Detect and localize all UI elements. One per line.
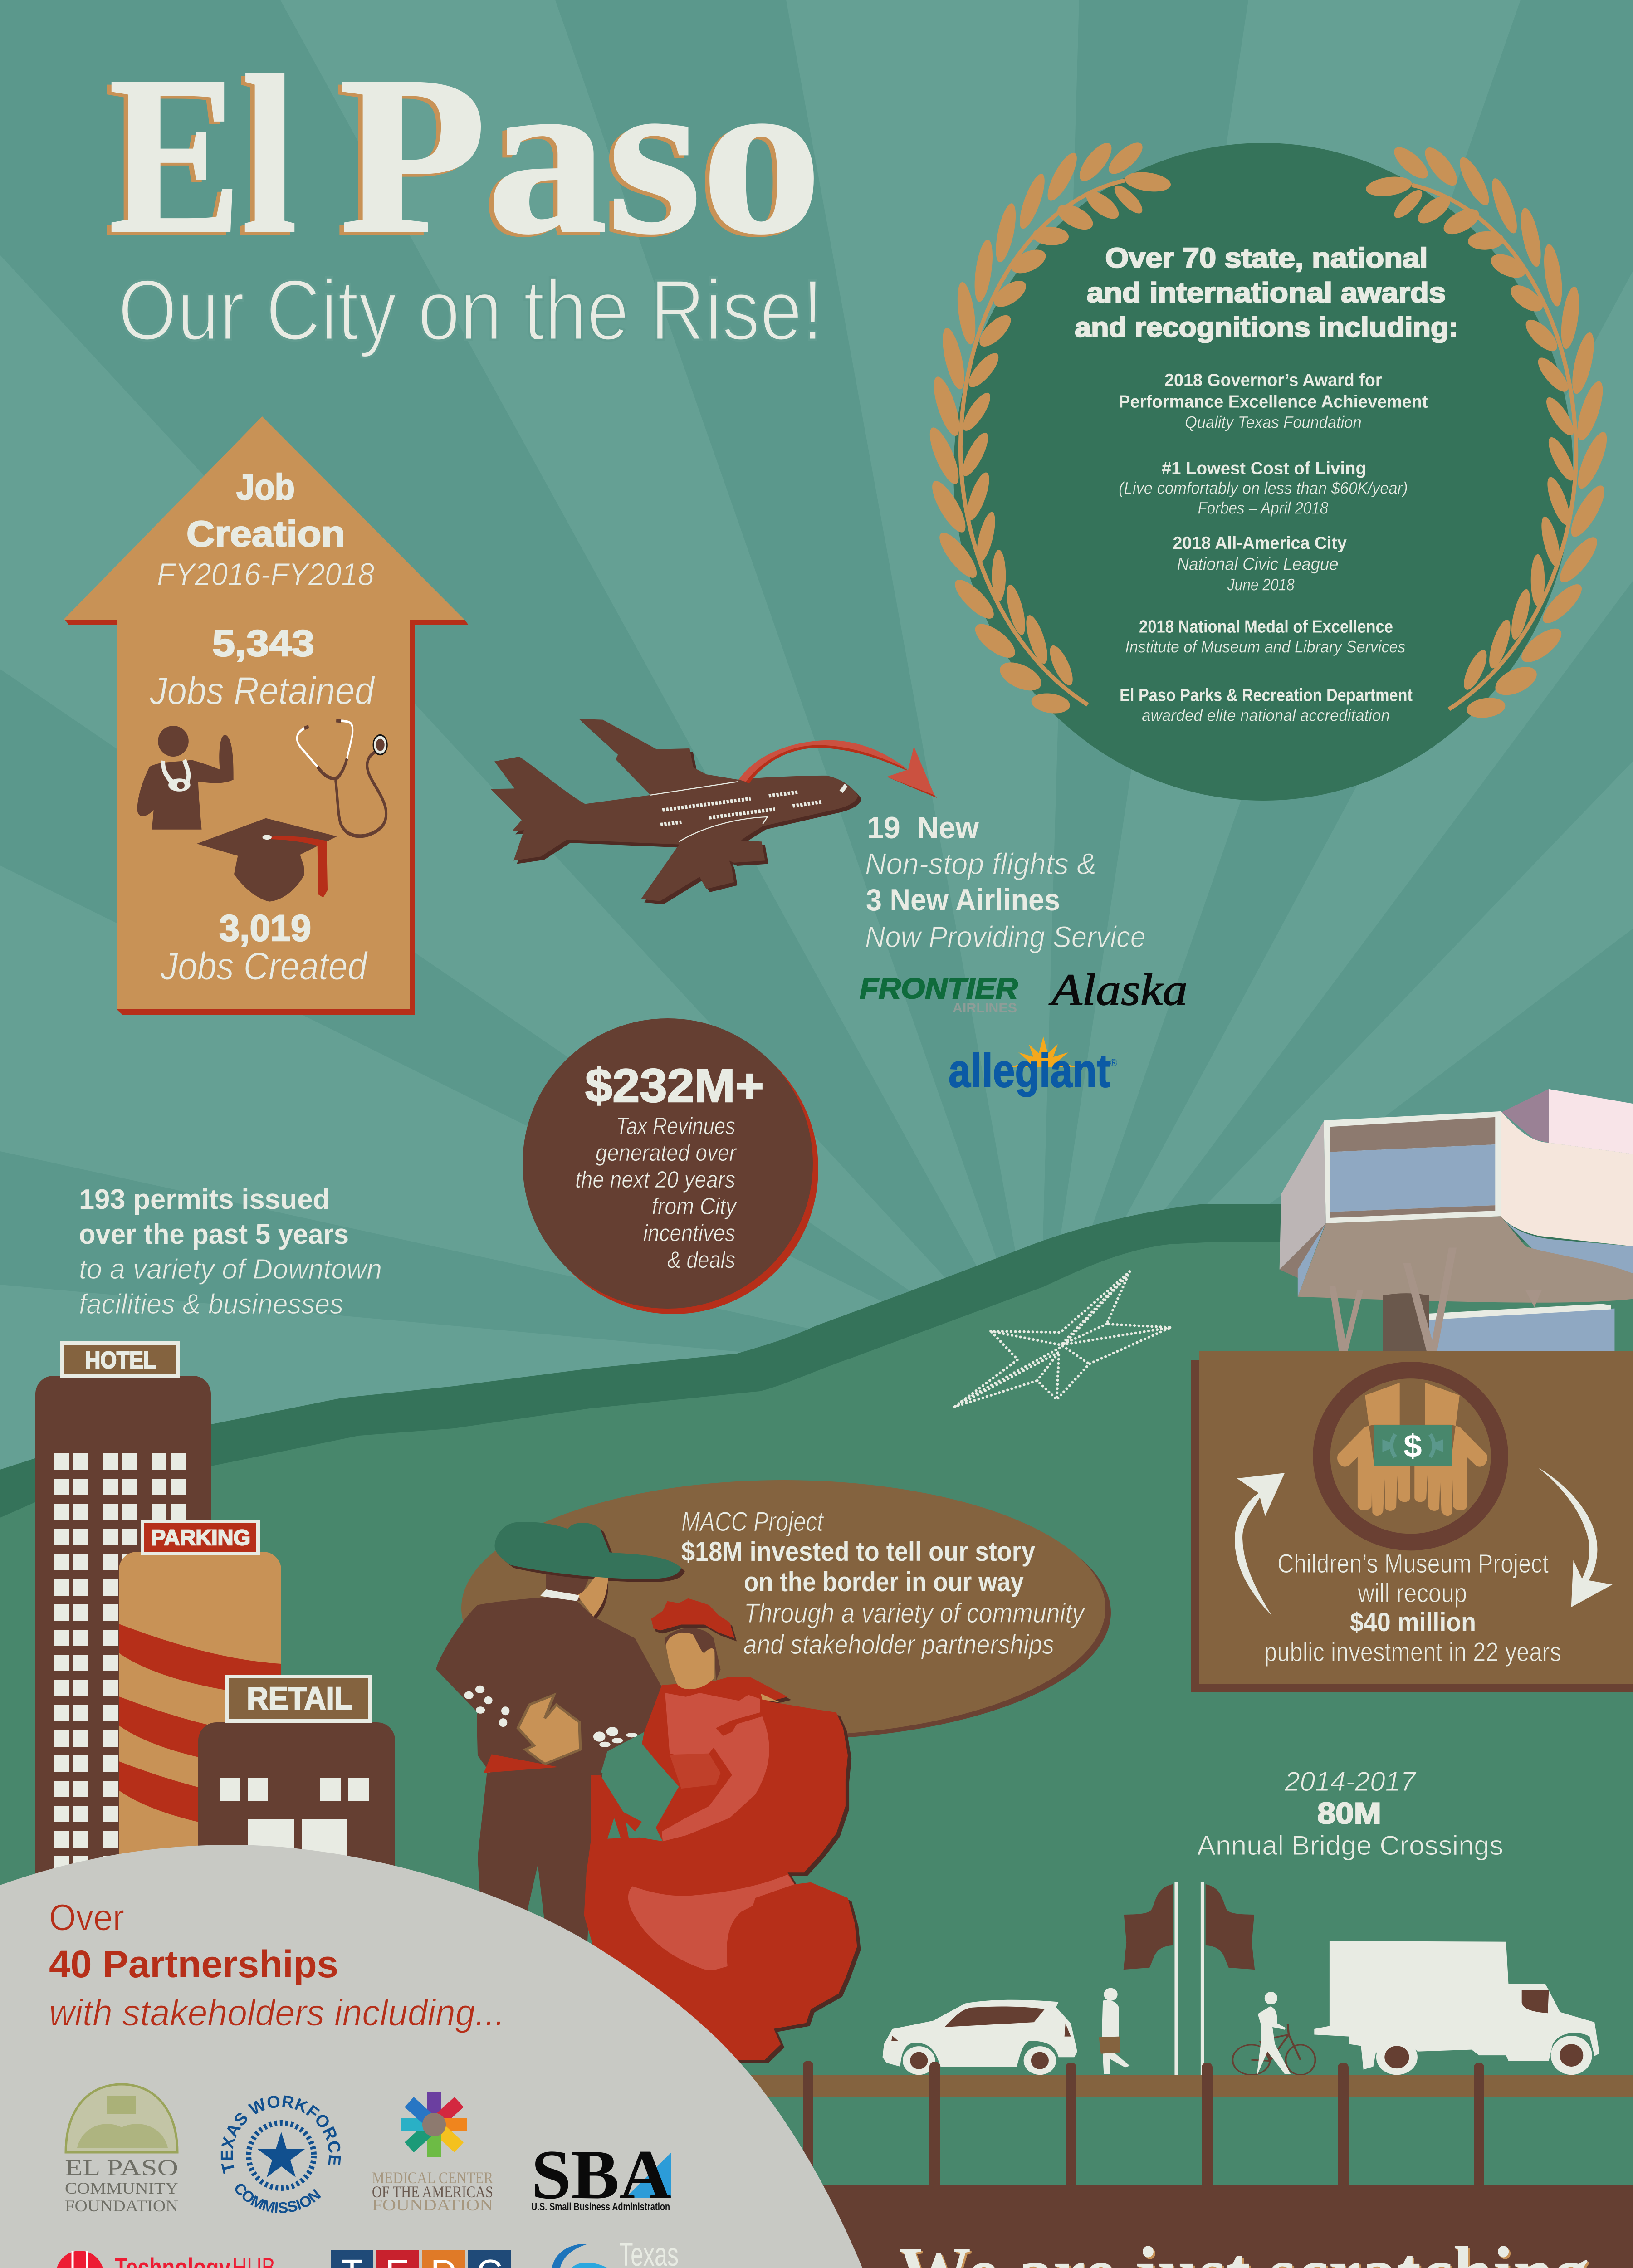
awards list: El Paso Parks & Recreation Department	[1120, 685, 1413, 705]
panel: MACC project ellipse: $18M invested to tell our story	[681, 1536, 1036, 1567]
awards list: 2018 National Medal of Excellence	[1139, 617, 1393, 636]
sign: retail	[227, 1677, 370, 1721]
stat: jobs retained: 5,343	[212, 623, 314, 664]
awards list: awarded elite national accreditation	[1142, 706, 1390, 724]
illustration: parking garage	[119, 1521, 281, 1960]
text: bridge crossings: Annual Bridge Crossings	[1197, 1830, 1503, 1861]
panel: MACC project ellipse: MACC Project	[681, 1506, 824, 1537]
awards list: Forbes – April 2018	[1198, 499, 1329, 517]
text: downtown permits: to a variety of Downtown	[79, 1254, 382, 1285]
callout: tax revenues circle: the next 20 years	[575, 1167, 735, 1193]
icon: box truck	[1314, 1941, 1599, 2075]
logo: small business administration: SBA	[531, 2136, 671, 2214]
title: El	[104, 32, 293, 284]
icon: hands holding money	[1321, 1370, 1500, 1542]
logo: el paso community foundation	[65, 2084, 178, 2215]
hill landscape	[0, 1202, 1633, 2223]
awards list: Performance Excellence Achievement	[1119, 392, 1428, 412]
callout: tax revenues circle: generated over	[596, 1140, 737, 1166]
logo: technology hub	[56, 2251, 275, 2268]
panel: MACC project ellipse: Through a variety of community	[744, 1598, 1086, 1628]
callout: tax revenues circle: from City	[652, 1193, 738, 1220]
illustration: bridge crossing traffic	[883, 1882, 1599, 2076]
icon: left laurel branch	[924, 137, 1172, 716]
illustration: folklorico dancer	[584, 1598, 861, 2063]
stat: jobs created: Jobs Created	[160, 945, 368, 988]
icon: dotted star on the mountain	[955, 1271, 1171, 1407]
logo: frontier airlines: AIRLINES	[953, 1001, 1017, 1016]
sign: hotel	[62, 1343, 178, 1376]
stat: jobs retained	[149, 623, 375, 713]
logo: frontier airlines: FRONTIER	[860, 972, 1018, 1005]
arrow: red flight path	[739, 740, 937, 798]
icon: airplane	[491, 719, 861, 904]
logo: medical center of the americas foundation: MEDICAL CENTER	[372, 2169, 493, 2187]
museum project text	[1264, 1549, 1561, 1667]
awards list: #1 Lowest Cost of Living	[1162, 459, 1366, 479]
text: downtown permits: 193 permits issued	[79, 1184, 330, 1215]
logo: medical center of the americas foundation: OF THE AMERICAS	[372, 2183, 493, 2201]
illustration: retail building	[198, 1677, 395, 1949]
icon: photographer	[137, 726, 234, 830]
logo: small business administration: U.S. Small Business Administration	[531, 2201, 670, 2213]
logo: el paso community foundation: COMMUNITY	[65, 2179, 178, 2197]
icon: right laurel branch	[1364, 142, 1613, 720]
title: Paso	[335, 32, 817, 284]
awards heading: and international awards	[1087, 277, 1446, 308]
stat: jobs created	[160, 908, 368, 988]
arrow: left cycle arrow	[1235, 1473, 1285, 1616]
panel: childrens museum project	[1191, 1351, 1633, 1692]
awards heading	[1075, 243, 1458, 343]
panel: MACC project ellipse: and stakeholder partnerships	[743, 1629, 1054, 1660]
logo: texas economic development council	[331, 2250, 511, 2268]
partnerships heading	[49, 1897, 505, 2033]
text: new flights	[865, 811, 1146, 953]
partnerships heading: 40 Partnerships	[49, 1943, 338, 1985]
text: new flights: Now Providing Service	[865, 920, 1146, 953]
illustration: hotel building	[35, 1343, 211, 1965]
title: El	[109, 29, 297, 281]
museum project text: Children’s Museum Project	[1277, 1549, 1549, 1579]
logo: allegiant: allegiant	[949, 1045, 1110, 1097]
sign: hotel: HOTEL	[85, 1347, 156, 1374]
illustration: charro man	[436, 1522, 685, 1962]
text: downtown permits	[79, 1184, 382, 1320]
heading: job creation	[157, 467, 374, 592]
stat: jobs retained: Jobs Retained	[149, 670, 375, 713]
awards list: June 2018	[1227, 576, 1295, 594]
logo: medical center of the americas foundation: FOUNDATION	[372, 2196, 493, 2214]
icon: pedestrian with bag	[1099, 1988, 1130, 2074]
panel: MACC project ellipse: on the border in our way	[744, 1567, 1024, 1597]
logo: texas gas service	[552, 2237, 749, 2268]
subtitle: Our City on the Rise!	[118, 262, 823, 358]
partnerships heading: Over	[49, 1897, 124, 1938]
awards list: 2018 Governor’s Award for	[1164, 371, 1382, 390]
title: Paso	[339, 29, 822, 281]
text: new flights: 19 New	[867, 811, 979, 845]
awards list: Quality Texas Foundation	[1185, 413, 1362, 432]
heading: job creation: Creation	[186, 513, 345, 554]
logo: el paso community foundation: FOUNDATION	[65, 2197, 178, 2215]
arrow: right cycle arrow	[1539, 1468, 1613, 1607]
title	[104, 29, 822, 284]
heading: job creation: FY2016-FY2018	[157, 557, 374, 592]
text: new flights: 3 New Airlines	[866, 883, 1060, 917]
logo: medical center of the americas foundation	[372, 2092, 493, 2214]
logo: texas workforce commission: TEXAS WORKFORCE	[218, 2092, 344, 2175]
logo: texas workforce commission: COMMISSION	[230, 2180, 324, 2217]
icon: hands holding money: $	[1403, 1428, 1422, 1464]
sign: parking: PARKING	[151, 1526, 250, 1550]
text: bridge crossings: 2014-2017	[1284, 1766, 1417, 1797]
awards list: Institute of Museum and Library Services	[1125, 637, 1406, 656]
icon: cyclist walking bike	[1232, 1992, 1315, 2076]
museum project text: will recoup	[1357, 1579, 1467, 1608]
stat: jobs created: 3,019	[219, 908, 311, 949]
sign: retail: RETAIL	[247, 1681, 352, 1716]
callout: tax revenues circle: & deals	[667, 1247, 735, 1273]
panel: MACC project ellipse	[461, 1480, 1111, 1740]
heading: job creation: Job	[236, 467, 295, 507]
logo: alaska: Alaska	[1048, 964, 1188, 1015]
awards heading: Over 70 state, national	[1105, 243, 1428, 274]
panel: bottom band	[680, 2185, 1633, 2268]
awards list: 2018 All-America City	[1173, 533, 1347, 553]
callout: tax revenues circle: incentives	[643, 1220, 735, 1246]
callout: tax revenues circle: $232M+	[585, 1060, 764, 1112]
sign: parking	[142, 1521, 258, 1554]
callout: tax revenues circle: Tax Revinues	[616, 1113, 735, 1139]
callout: tax revenues circle	[523, 1018, 818, 1314]
bridge road	[680, 2075, 1633, 2097]
bridge posts	[803, 2061, 1484, 2199]
awards heading: and recognitions including:	[1075, 312, 1458, 343]
text: downtown permits: over the past 5 years	[79, 1219, 349, 1250]
logo: texas workforce commission	[218, 2092, 344, 2217]
logo: el paso community foundation: EL PASO	[65, 2155, 178, 2180]
icon: car	[883, 2000, 1077, 2075]
text: downtown permits: facilities & businesses	[79, 1289, 343, 1320]
illustration: childrens museum building	[1280, 1089, 1633, 1351]
icon: graduation cap	[197, 818, 337, 902]
panel: job creation arrow	[64, 416, 469, 1015]
icon: stethoscope	[297, 721, 387, 836]
text: bridge crossings	[1197, 1766, 1503, 1861]
awards list: National Civic League	[1177, 555, 1339, 574]
logo: allegiant: ®	[1110, 1057, 1117, 1068]
panel: partnerships	[0, 1845, 916, 2268]
awards list	[1119, 371, 1428, 724]
museum project text: public investment in 22 years	[1264, 1637, 1561, 1667]
partnerships heading: with stakeholders including...	[49, 1992, 505, 2033]
icon: flags on poles	[1124, 1882, 1255, 2075]
museum project text: $40 million	[1350, 1608, 1476, 1637]
text: bridge crossings: 80M	[1317, 1796, 1381, 1830]
text: new flights: Non-stop flights &	[865, 847, 1096, 880]
awards list: (Live comfortably on less than $60K/year)	[1119, 479, 1408, 497]
panel: awards circle	[924, 137, 1613, 801]
